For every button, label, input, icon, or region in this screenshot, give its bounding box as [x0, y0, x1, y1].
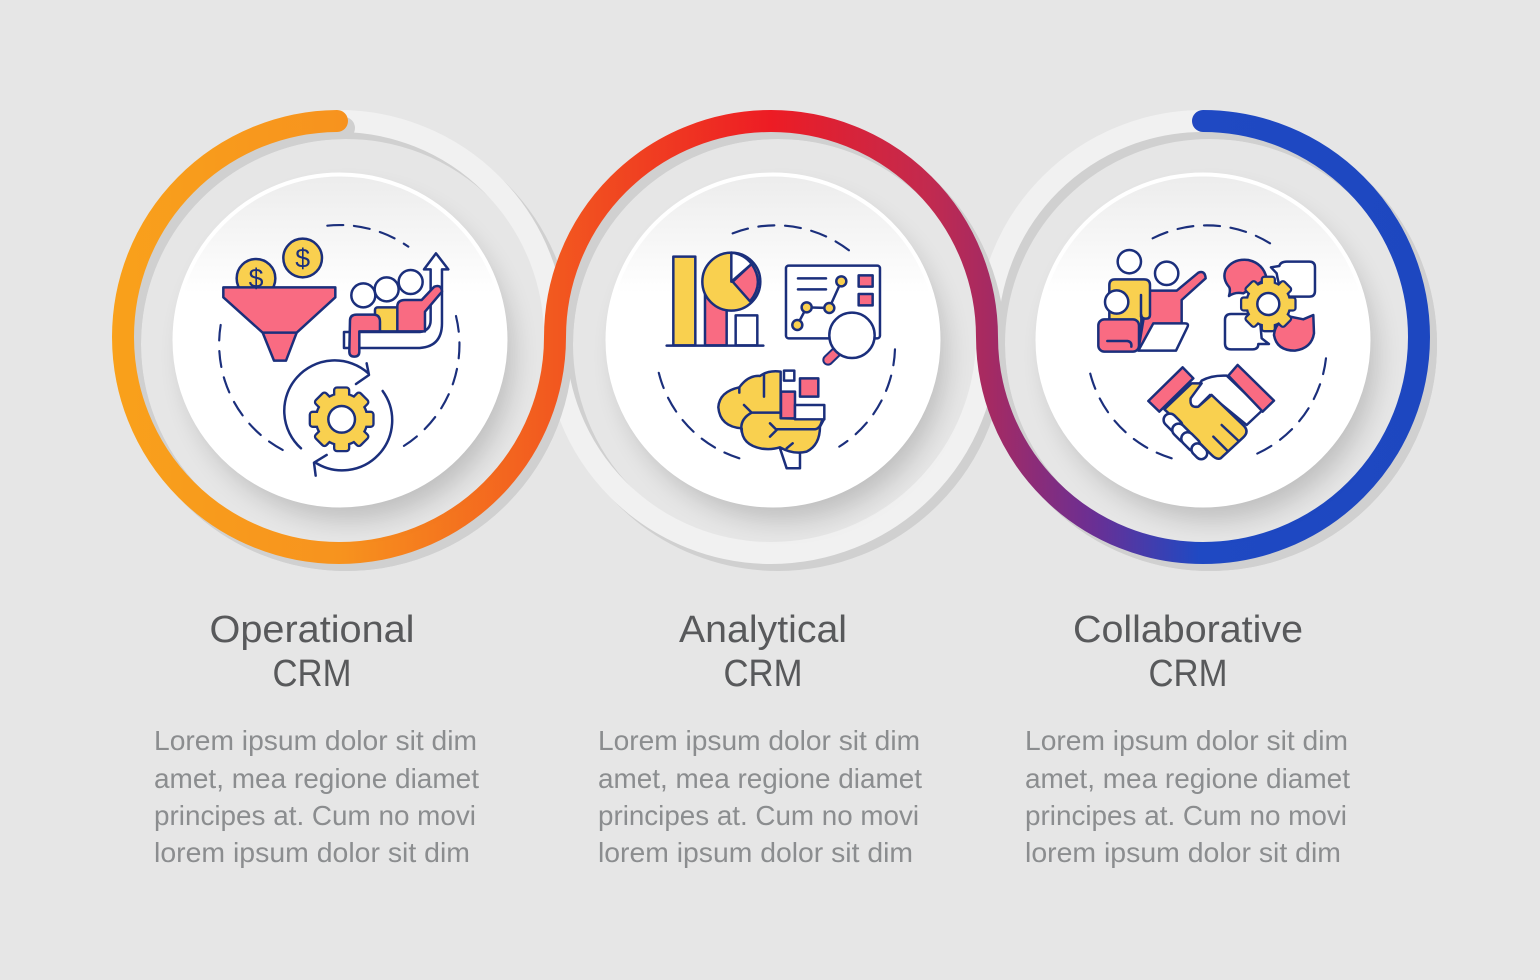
panel: analytical disc	[608, 174, 946, 520]
pale background rings	[123, 121, 1419, 553]
text block: Analytical description: principes at. Cum no movi	[598, 800, 919, 831]
heading: Analytical CRM: CRM	[724, 653, 802, 695]
text block: Collaborative description	[1025, 725, 1350, 868]
icon: analytical CRM	[658, 225, 895, 468]
icon: operational CRM: $	[295, 243, 310, 273]
ring shadows	[130, 128, 1426, 560]
text block: Operational description	[154, 725, 479, 868]
panel: collaborative disc	[1038, 174, 1376, 520]
text block: Analytical description	[598, 725, 922, 868]
text block: Collaborative description: amet, mea regione diamet	[1025, 763, 1350, 794]
heading: Operational CRM: Operational	[210, 609, 414, 651]
text block: Collaborative description: principes at. Cum no movi	[1025, 800, 1347, 831]
text block: Analytical description: Lorem ipsum dolor sit dim	[598, 725, 920, 756]
icon: collaborative CRM	[1090, 225, 1326, 462]
heading: Analytical CRM	[679, 609, 847, 695]
text block: Operational description: Lorem ipsum dolor sit dim	[154, 725, 477, 756]
heading: Collaborative CRM: Collaborative	[1073, 609, 1303, 651]
heading: Operational CRM	[210, 609, 414, 695]
icon: operational CRM	[219, 225, 459, 476]
icon: operational CRM: $	[249, 263, 264, 293]
heading: Collaborative CRM: CRM	[1148, 653, 1228, 695]
text block: Analytical description: amet, mea regione diamet	[598, 763, 922, 794]
text block: Operational description: amet, mea regione diamet	[154, 763, 479, 794]
heading: Operational CRM: CRM	[272, 653, 352, 695]
panel: operational disc	[174, 174, 513, 520]
flowing ribbon shadow	[130, 128, 1426, 560]
text block: Collaborative description: Lorem ipsum dolor sit dim	[1025, 725, 1348, 756]
text block: Operational description: principes at. Cum no movi	[154, 800, 476, 831]
heading: Analytical CRM: Analytical	[679, 609, 847, 651]
text block: Analytical description: lorem ipsum dolor sit dim	[598, 837, 913, 868]
text block: Operational description: lorem ipsum dolor sit dim	[154, 837, 470, 868]
text block: Collaborative description: lorem ipsum dolor sit dim	[1025, 837, 1341, 868]
flowing gradient ribbon	[123, 121, 1419, 553]
heading: Collaborative CRM	[1073, 609, 1303, 695]
